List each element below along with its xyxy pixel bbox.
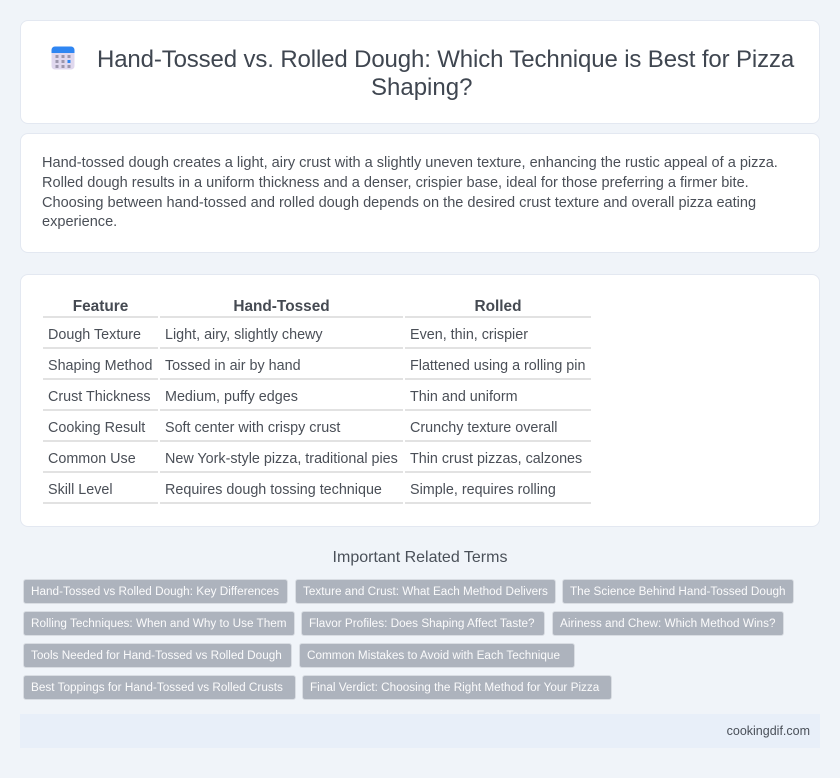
title second line: Shaping?: [371, 74, 472, 101]
footer: [20, 714, 820, 748]
row: Common Use: [48, 451, 582, 467]
tag group: related terms: The Science Behind Hand-Tossed Dough: [570, 585, 786, 598]
tag group: related terms: Hand-Tossed vs Rolled Dough: Key Differences: [31, 585, 279, 598]
row: Cooking Result: [48, 420, 558, 436]
intro text: Rolled dough results in a uniform thickness and a denser, crispier base, ideal for those preferring a firmer bite.: [42, 175, 749, 191]
tag group: related terms: Flavor Profiles: Does Shaping Affect Taste?: [309, 617, 535, 630]
text: Soft center with crispy crust: [165, 420, 340, 436]
row: Dough Texture: Dough Texture: [48, 327, 141, 343]
tag group: related terms: Airiness and Chew: Which Method Wins?: [560, 617, 776, 630]
text: Even, thin, crispier: [410, 327, 528, 343]
tag group: related terms: Common Mistakes to Avoid with Each Technique: [307, 649, 560, 662]
panel: intro: [20, 133, 820, 253]
intro text: [42, 155, 778, 230]
panel: comparison table: [20, 274, 820, 527]
text: Light, airy, slightly chewy: [165, 327, 323, 343]
row: Cooking Result: Cooking Result: [48, 420, 145, 436]
panel: header: [20, 20, 820, 124]
row: Shaping Method: [48, 358, 585, 374]
tag group: related terms: Tools Needed for Hand-Tossed vs Rolled Dough: [31, 649, 282, 662]
text: Crunchy texture overall: [410, 420, 558, 436]
row: Dough Texture: [48, 327, 528, 343]
column header: Feature: Feature: [73, 298, 128, 315]
tag group: related terms: [23, 579, 794, 700]
intro text: Choosing between hand-tossed and rolled dough depends on the desired crust texture and overall pizza eating: [42, 195, 756, 211]
row: Shaping Method: Shaping Method: [48, 358, 152, 374]
row: Skill Level: [48, 482, 556, 498]
text: Thin and uniform: [410, 389, 518, 405]
heading: related terms: Important Related Terms: [333, 549, 507, 566]
tag group: related terms: Rolling Techniques: When and Why to Use Them: [31, 617, 287, 630]
intro text: experience.: [42, 214, 117, 230]
text: Simple, requires rolling: [410, 482, 556, 498]
text: New York-style pizza, traditional pies: [165, 451, 398, 467]
tag group: related terms: Best Toppings for Hand-Tossed vs Rolled Crusts: [31, 681, 283, 694]
title: Hand-Tossed vs. Rolled Dough: Which Technique is Best for Pizza: [97, 46, 794, 73]
text: Medium, puffy edges: [165, 389, 298, 405]
row: Crust Thickness: [48, 389, 518, 405]
text: Flattened using a rolling pin: [410, 358, 585, 374]
row: Skill Level: Skill Level: [48, 482, 113, 498]
text: Thin crust pizzas, calzones: [410, 451, 582, 467]
intro text: Hand-tossed dough creates a light, airy crust with a slightly uneven texture, enhancing the rustic appeal of a pizza.: [42, 155, 778, 171]
icon: calendar grid: [52, 46, 74, 70]
text: Requires dough tossing technique: [165, 482, 382, 498]
table: [43, 316, 591, 504]
footer source text: cookingdif.com: [727, 724, 810, 738]
column header: Hand-Tossed: Hand-Tossed: [233, 298, 330, 315]
text: Tossed in air by hand: [165, 358, 301, 374]
tag group: related terms: Final Verdict: Choosing the Right Method for Your Pizza: [310, 681, 599, 694]
tag group: related terms: Texture and Crust: What Each Method Delivers: [303, 585, 548, 598]
row: Common Use: Common Use: [48, 451, 136, 467]
column header: Rolled: Rolled: [474, 298, 522, 315]
row: Crust Thickness: Crust Thickness: [48, 389, 151, 405]
